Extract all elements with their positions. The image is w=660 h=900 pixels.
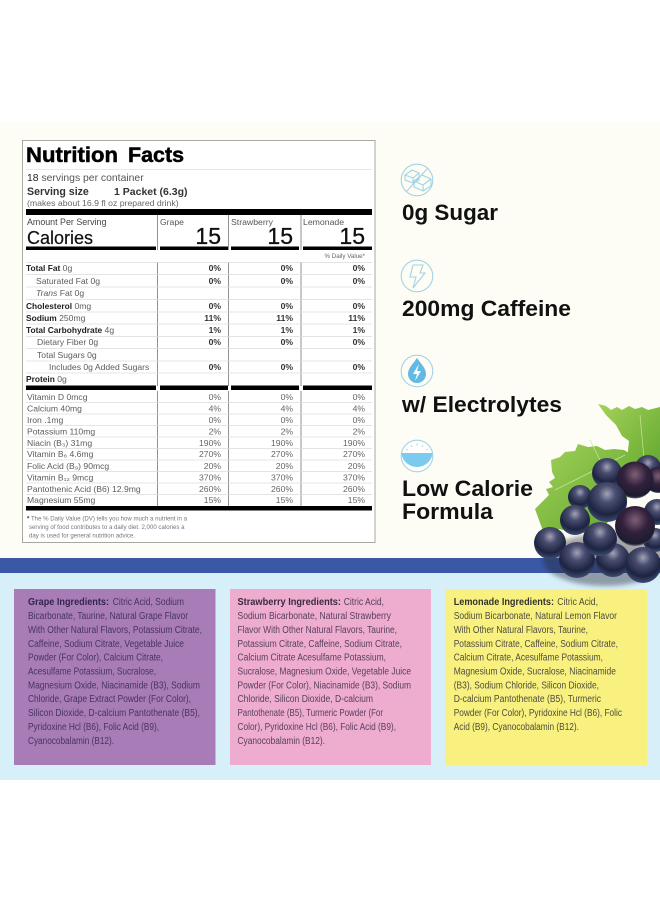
feature: 200mg Caffeine: 200mg Caffeine — [402, 296, 571, 321]
panel: strawberry ingredients: Pantothenate (B5), Turmeric Powder (For — [238, 708, 384, 719]
vitamin rows: 20% — [276, 461, 293, 471]
panel: grape ingredients: Silicon Dioxide, D-calcium Pantothenate (B5), — [28, 708, 200, 719]
panel: grape ingredients: Chloride, Grape Extract Powder (For Color), — [28, 694, 191, 705]
vitamin rows: 15% — [276, 495, 293, 505]
icon: electrolytes drop — [401, 355, 433, 387]
grape calories: Grape — [160, 217, 184, 227]
prepared drink note: (makes about 16.9 fl oz prepared drink) — [27, 198, 179, 208]
leaf: upper right — [598, 404, 660, 480]
panel: lemonade ingredients: With Other Natural Flavors, Taurine, — [454, 625, 588, 636]
cream background — [0, 122, 660, 558]
panel: grape ingredients: Magnesium Oxide, Niacinamide (B3), Sodium — [28, 680, 200, 692]
nutrient rows: 11% — [276, 313, 293, 323]
panel: lemonade ingredients: Sodium Bicarbonate, Natural Lemon Flavor — [454, 611, 618, 622]
vitamin rows: 4% — [281, 404, 293, 414]
nutrient rows: Sodium 250mg — [26, 313, 86, 323]
daily value label: % Daily Value* — [325, 253, 366, 260]
panel: lemonade ingredients: Potassium Citrate, Caffeine, Sodium Citrate, — [454, 639, 618, 650]
panel: grape ingredients: Powder (For Color), Calcium Citrate, — [28, 652, 163, 664]
light blue ingredients background — [0, 573, 660, 780]
nutrient rows: 0% — [281, 362, 293, 372]
nutrient rows: 1% — [353, 325, 365, 335]
panel: grape ingredients: Caffeine, Sodium Citrate, Vegetable Juice — [28, 639, 184, 650]
panel: strawberry ingredients: Powder (For Color), Niacinamide (B3), Sodium — [238, 680, 411, 692]
icon: low calorie gauge — [401, 440, 433, 472]
panel: strawberry ingredients: Citric Acid, — [344, 597, 384, 608]
panel: lemonade ingredients — [445, 589, 647, 765]
serving size value: 1 Packet (6.3g) — [114, 186, 188, 198]
panel: grape ingredients: Grape Ingredients: — [28, 597, 109, 608]
calories rules — [26, 246, 372, 250]
panel: strawberry ingredients: Strawberry Ingredients: — [238, 597, 341, 608]
panel: strawberry ingredients: Cyanocobalamin (B12). — [238, 736, 325, 747]
vitamin rows: 190% — [271, 438, 293, 448]
panel: strawberry ingredients: Potassium Citrate, Caffeine, Sodium Citrate, — [238, 639, 402, 650]
feature: Low Calorie Formula: Low Calorie — [402, 476, 533, 501]
panel: lemonade ingredients: D-calcium Pantothenate (B5), Turmeric — [454, 694, 601, 705]
vitamin rows: Magnesium 55mg — [27, 495, 96, 505]
heading: Nutrition Facts: Facts — [128, 144, 184, 167]
lemonade calories — [303, 217, 365, 249]
lemonade calories: Lemonade — [303, 217, 344, 227]
vitamin rows: 260% — [199, 484, 221, 494]
nutrient rows: 0% — [353, 337, 365, 347]
panel: grape ingredients: Bicarbonate, Taurine, Natural Grape Flavor — [28, 611, 189, 622]
panel: grape ingredients: Citric Acid, Sodium — [113, 597, 184, 608]
vitamin rows: 0% — [209, 415, 221, 425]
berries — [534, 455, 660, 583]
leaf veins — [555, 415, 645, 490]
vitamin rows: 370% — [199, 472, 221, 482]
grape calories — [160, 217, 221, 249]
panel: lemonade ingredients: Citric Acid, — [557, 597, 598, 608]
feature: Low Calorie Formula — [402, 476, 533, 524]
nutrient rows: Trans Fat 0g — [36, 288, 84, 298]
panel: strawberry ingredients: Calcium Citrate Acesulfame Potassium, — [238, 652, 386, 664]
nutrient rows: 0% — [281, 301, 293, 311]
blue band — [0, 558, 660, 573]
panel: strawberry ingredients: Chloride, Silicon Dioxide, D-calcium — [238, 694, 373, 705]
panel: strawberry ingredients: Sodium Bicarbonate, Natural Strawberry — [238, 611, 391, 622]
nutrient rows: 0% — [353, 362, 365, 372]
vitamin rows: 20% — [348, 461, 365, 471]
nutrient rows: 0% — [353, 301, 365, 311]
lemonade calories: 15 — [339, 223, 365, 249]
serving size: Serving size — [27, 186, 89, 198]
vitamin rows: 20% — [204, 461, 221, 471]
nutrient rows: Cholesterol 0mg — [26, 301, 91, 311]
nutrient rows: 0% — [209, 263, 221, 273]
nutrient rows: Includes 0g Added Sugars — [49, 362, 149, 372]
vitamin rows: 0% — [209, 392, 221, 402]
vitamin rows: 4% — [353, 404, 365, 414]
vitamin rows: 270% — [199, 449, 221, 459]
vitamin rows: 190% — [343, 438, 365, 448]
footnote: day is used for general nutrition advice. — [29, 532, 135, 540]
vitamin rows: Iron .1mg — [27, 415, 64, 425]
vitamin rows: 370% — [271, 472, 293, 482]
vitamin rows: 270% — [271, 449, 293, 459]
vitamin rows: 0% — [281, 415, 293, 425]
nutrient rows: Total Sugars 0g — [37, 350, 97, 360]
nutrient rows: 1% — [209, 325, 221, 335]
servings text: 18 servings per container — [27, 173, 144, 184]
panel: lemonade ingredients: Powder (For Color), Pyridoxine Hcl (B6), Folic — [454, 708, 622, 719]
strawberry calories: 15 — [267, 223, 293, 249]
nutrient rows: Total Fat 0g — [26, 263, 72, 273]
vitamin rows: 270% — [343, 449, 365, 459]
panel: lemonade ingredients: (B3), Sodium Chloride, Silicon Dioxide, — [454, 680, 599, 692]
vitamin rows — [27, 392, 365, 505]
feature: 0g Sugar: 0g Sugar — [402, 200, 498, 225]
illustration: grape bunch with leaves — [534, 404, 660, 586]
amount per serving: Amount Per Serving — [27, 217, 106, 227]
vitamin rows: 15% — [204, 495, 221, 505]
thick rules under protein — [26, 386, 372, 390]
nutrient rows: 11% — [348, 313, 365, 323]
feature: Low Calorie Formula: Formula — [402, 499, 493, 524]
icon: no sugar — [401, 164, 433, 196]
vitamin rows: Pantothenic Acid (B6) 12.9mg — [27, 484, 141, 494]
nutrient rows: 0% — [353, 276, 365, 286]
nutrient rows: 11% — [204, 313, 221, 323]
nutrient rows: 0% — [281, 337, 293, 347]
panel: grape ingredients: Cyanocobalamin (B12). — [28, 736, 114, 747]
panel: lemonade ingredients: Calcium Citrate, Acesulfame Potassium, — [454, 652, 603, 664]
feature: w/ Electrolytes: w/ Electrolytes — [401, 392, 562, 417]
grape shadow — [543, 534, 660, 586]
bottom thick rule — [26, 506, 372, 510]
vitamin rows: 4% — [209, 404, 221, 414]
nutrient rows: Protein 0g — [26, 374, 67, 384]
nutrient rows: 0% — [281, 263, 293, 273]
nutrient rows: 0% — [209, 337, 221, 347]
vitamin rows: Folic Acid (B₉) 90mcg — [27, 461, 109, 471]
vitamin rows: Vitamin B₆ 4.6mg — [27, 449, 94, 459]
panel: grape ingredients: With Other Natural Flavors, Potassium Citrate, — [28, 625, 202, 636]
nutrient rows: 0% — [209, 301, 221, 311]
panel: nutrition facts — [22, 140, 375, 542]
strawberry calories: Strawberry — [231, 217, 274, 227]
nutrient rows: Dietary Fiber 0g — [37, 337, 98, 347]
vitamin rows: 0% — [281, 392, 293, 402]
panel: strawberry ingredients — [230, 589, 431, 765]
panel: grape ingredients — [14, 589, 216, 765]
panel: lemonade ingredients: Lemonade Ingredients: — [454, 597, 554, 608]
footnote: serving of food contributes to a daily diet. 2,000 calories a — [29, 524, 185, 531]
thick rule — [26, 209, 372, 215]
vitamin rows: Calcium 40mg — [27, 404, 82, 414]
heading: Nutrition Facts: Nutrition — [26, 144, 118, 167]
vitamin rows: 0% — [353, 392, 365, 402]
nutrient rows — [26, 263, 365, 384]
panel: grape ingredients: Acesulfame Potassium, Sucralose, — [28, 666, 156, 678]
vitamin rows: 15% — [348, 495, 365, 505]
vitamin rows: Niacin (B₃) 31mg — [27, 438, 92, 448]
vitamin rows: 2% — [209, 426, 221, 436]
panel: strawberry ingredients: Color), Pyridoxine Hcl (B6), Folic Acid (B9), — [238, 722, 396, 733]
footnote: * The % Daily Value (DV) tells you how much a nutrient in a — [27, 516, 188, 522]
vitamin rows: 370% — [343, 472, 365, 482]
heading: Nutrition Facts — [26, 144, 184, 167]
nutrient rows: 1% — [281, 325, 293, 335]
vitamin rows: Vitamin B₁₂ 9mcg — [27, 472, 93, 482]
vitamin rows: 190% — [199, 438, 221, 448]
grape calories: 15 — [195, 223, 221, 249]
nutrient rows: 0% — [353, 263, 365, 273]
nutrient rows: Saturated Fat 0g — [36, 276, 100, 286]
nutrient rows: 0% — [209, 276, 221, 286]
vitamin rows: 2% — [281, 426, 293, 436]
panel: lemonade ingredients: Acid (B9), Cyanocobalamin (B12). — [454, 722, 579, 733]
panel: strawberry ingredients: Sucralose, Magnesium Oxide, Vegetable Juice — [238, 666, 411, 678]
panel: strawberry ingredients: Flavor With Other Natural Flavors, Taurine, — [238, 625, 397, 636]
strawberry calories — [231, 217, 293, 249]
vitamin rows: Potassium 110mg — [27, 426, 95, 436]
panel: lemonade ingredients: Magnesium Oxide, Sucralose, Niacinamide — [454, 666, 616, 678]
vitamin rows: 2% — [353, 426, 365, 436]
footnote — [27, 516, 188, 540]
icon: caffeine bolt — [401, 260, 433, 292]
leaf: lower left — [535, 444, 629, 533]
nutrient rows: 0% — [281, 276, 293, 286]
nutrient rows: Total Carbohydrate 4g — [26, 325, 114, 335]
vitamin rows: 260% — [271, 484, 293, 494]
calories label: Calories — [27, 228, 93, 248]
vitamin rows: 260% — [343, 484, 365, 494]
panel: grape ingredients: Pyridoxine Hcl (B6), Folic Acid (B9), — [28, 722, 159, 733]
vitamin rows: 0% — [353, 415, 365, 425]
nutrient rows: 0% — [209, 362, 221, 372]
vitamin rows: Vitamin D 0mcg — [27, 392, 88, 402]
